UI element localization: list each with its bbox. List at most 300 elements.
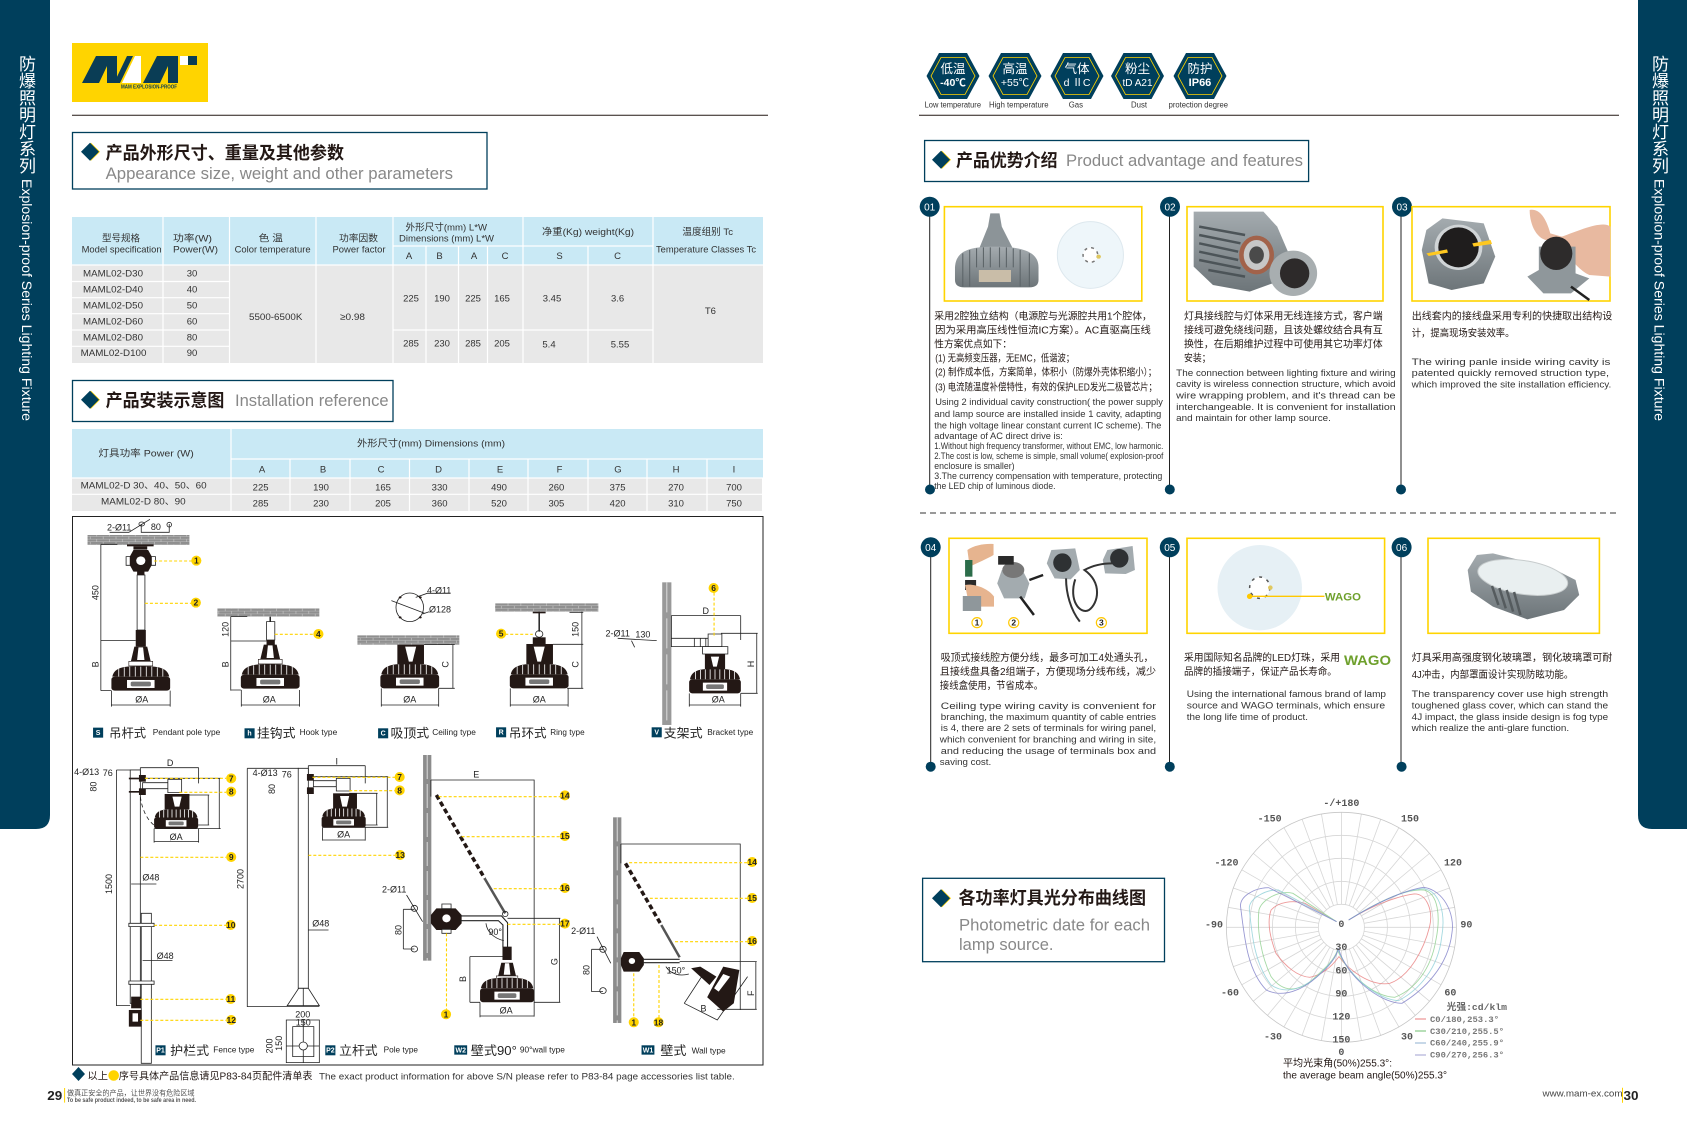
feature 06 Chinese text: 灯具采用高强度钢化玻璃罩，钢化玻璃罩可耐 xyxy=(1412,651,1612,664)
heading: photometric data: lamp source. xyxy=(959,935,1054,954)
table header labels: Model specification xyxy=(82,245,162,256)
panel: upper installation diagrams xyxy=(88,519,758,741)
diagram: fence type: 80 xyxy=(88,782,98,792)
diagram: 90 degree wall type: 14 xyxy=(560,790,570,800)
badge 03: 03 xyxy=(1396,202,1408,214)
feature 01 English text: Using 2 individual cavity construction( the power supply xyxy=(935,397,1163,408)
photo: wiring panel and hand xyxy=(1422,210,1610,300)
diagram: wall type: 18 xyxy=(654,1017,664,1027)
polar angle labels: 30 xyxy=(1401,1032,1413,1043)
badge 05: 05 xyxy=(1164,543,1176,554)
dimension table labels: A xyxy=(259,464,266,475)
mount type captions, first row: S xyxy=(96,730,101,737)
diagram: fence type: 11 xyxy=(226,994,236,1004)
feature 04 Chinese text: 接线盒使用，节省成本。 xyxy=(940,679,1043,692)
feature 06 English text: which realize the anti-glare function. xyxy=(1411,723,1569,734)
diagram: pole type: 2700 xyxy=(236,869,246,889)
polar angle labels: -30 xyxy=(1264,1032,1282,1043)
feature 01 English text: advantage of AC direct drive is: xyxy=(934,431,1063,442)
dimension table labels: 灯具功率 Power (W) xyxy=(98,448,194,460)
dimension table labels: 外形尺寸(mm) Dimensions (mm) xyxy=(357,438,505,450)
distribution curves xyxy=(1241,887,1452,1003)
table header labels: S xyxy=(556,251,563,262)
feature 01 Chinese text: 因为采用高压线性恒流IC方案）。AC直驱高压线 xyxy=(935,323,1151,336)
diagram: bracket type: H xyxy=(746,661,756,667)
feature 06 English text: toughened glass cover, which can stand the xyxy=(1412,701,1608,712)
feature 03 English text: patented quickly removed struction type, xyxy=(1412,368,1609,379)
table body values: ≥0.98 xyxy=(340,312,365,323)
polar angle labels: 150 xyxy=(1401,815,1419,826)
table body values: 80 xyxy=(187,333,197,344)
mount type captions, first row: V xyxy=(654,730,659,737)
photo: wiring cavity connection xyxy=(1194,212,1317,296)
table body values: MAML02-D40 xyxy=(83,285,143,296)
diagram: fence type: 10 xyxy=(226,920,236,930)
feature 02 English text xyxy=(1175,368,1396,424)
feature 01 Chinese text: (1) 无高频变压器，无EMC，低谐波； xyxy=(935,351,1074,364)
page number right with website: 30 xyxy=(1624,1088,1638,1103)
mount type captions, second row: 壁式90° xyxy=(471,1043,517,1058)
heading English: Photometric date for each xyxy=(959,916,1150,935)
polar angle labels: 90 xyxy=(1460,921,1472,932)
mount type captions, second row: P1 xyxy=(156,1048,165,1055)
mount type captions, second row: 护栏式 xyxy=(170,1043,210,1058)
feature 03 Chinese text xyxy=(1412,309,1612,339)
right band English title: Explosion-proof Series Lighting Fixture xyxy=(1652,179,1666,421)
mount type captions, second row: W1 xyxy=(643,1047,653,1054)
diagram: pendant pole type xyxy=(88,519,201,707)
badge 06: 06 xyxy=(1396,543,1408,554)
photo: LED disc with WAGO terminal xyxy=(1218,545,1361,630)
panel: feature 05 xyxy=(1160,537,1391,772)
photo frame 01 xyxy=(944,207,1142,301)
diagram: wall type: 1 xyxy=(631,1017,636,1027)
dimension table labels: G xyxy=(614,464,622,475)
badge: high temperature: +55℃ xyxy=(1001,77,1030,89)
mount type captions, first row: R xyxy=(499,730,504,737)
feature 04 English text: and reducing the usage of terminals box and xyxy=(941,746,1156,757)
heading: product advantage xyxy=(925,140,1309,182)
photo: toughened glass cover xyxy=(1468,553,1579,619)
diagram: pole type: 150 xyxy=(296,1017,311,1027)
polar angle labels: -60 xyxy=(1221,989,1239,1000)
badge: low temperature: -40℃ xyxy=(940,77,966,89)
badge: gas: 气体 xyxy=(1064,61,1090,76)
logo tagline: MAM EXPLOSION-PROOF xyxy=(121,84,177,90)
panel: feature 06 xyxy=(1392,537,1612,772)
diagram: pendant pole type: 2-Ø11 xyxy=(107,523,131,533)
header rule right xyxy=(919,114,1619,116)
diagram: pendant pole type: 2 xyxy=(193,598,198,608)
diagram: fence type xyxy=(74,758,236,1063)
diagram: fence type: D xyxy=(167,758,174,768)
feature 05 Chinese text xyxy=(1184,651,1391,678)
diagram: ceiling type: C xyxy=(440,661,450,668)
table header labels xyxy=(82,222,756,262)
polar angle labels: 0 xyxy=(1338,920,1344,931)
diagram: pole type: 150 xyxy=(274,1036,284,1051)
mount type captions, first row: C xyxy=(381,731,386,738)
badge 03 xyxy=(1392,197,1412,494)
table body values: 5.55 xyxy=(611,340,629,351)
diagram: 90 degree wall type: 16 xyxy=(560,883,570,893)
table: parameters xyxy=(72,217,763,363)
polar angle labels: 150 xyxy=(1332,1035,1350,1046)
polar angle labels: 60 xyxy=(1444,989,1456,1000)
diagram: 90 degree wall type: B xyxy=(458,976,468,982)
diagram: 90 degree wall type: 15 xyxy=(560,831,570,841)
page number left with slogan: 做真正安全的产品，让世界没有危险区域 xyxy=(67,1088,195,1098)
dimension table row 1: 700 xyxy=(726,483,742,494)
photo frame 05 xyxy=(1187,538,1385,633)
table header labels: C xyxy=(502,251,509,262)
diagram: hook type xyxy=(217,608,323,707)
dimension table row 2: 310 xyxy=(668,499,684,510)
feature 01 Chinese text: 性方案优点如下： xyxy=(934,337,1012,350)
polar angle labels: 90 xyxy=(1335,990,1347,1001)
photo frame 02 xyxy=(1187,207,1383,301)
diagram: 90 degree wall type: ØA xyxy=(500,1005,513,1015)
table header labels: Power(W) xyxy=(173,245,218,256)
right side band xyxy=(1638,0,1687,829)
dimension table labels: E xyxy=(497,464,503,475)
photo: wiring steps xyxy=(963,544,1135,628)
page number left with slogan: To be safe product indeed, to be safe area in need. xyxy=(67,1098,196,1104)
diagram: bracket type: D xyxy=(703,606,710,616)
polar angle labels: 120 xyxy=(1332,1012,1350,1023)
diagram: pole type: I xyxy=(336,756,338,766)
feature 01 English text xyxy=(934,397,1164,492)
feature 04 Chinese text: 且接线盘具备2组端子，方便现场分线布线，减少 xyxy=(940,665,1156,678)
dimension table row 2: 285 xyxy=(253,499,269,510)
table header labels: 功率(W) xyxy=(173,233,212,245)
diagram: 90 degree wall type: E xyxy=(473,769,479,779)
diagram: pendant pole type: 1 xyxy=(194,556,199,566)
mount type captions, first row xyxy=(93,727,753,741)
footnote left xyxy=(72,1067,735,1082)
diagram: ceiling type: ØA xyxy=(403,695,416,705)
badge 04 xyxy=(921,537,941,772)
feature 02 Chinese text: 换性，在后期维护过程中可使用其它功率灯体 xyxy=(1184,337,1383,350)
feature 04 Chinese text xyxy=(940,651,1156,692)
table header labels: 色 温 xyxy=(259,233,284,245)
photo frame 06 xyxy=(1428,538,1599,633)
badge: low temperature: Low temperature xyxy=(925,101,982,110)
diagram: hook type: ØA xyxy=(263,695,276,705)
heading Chinese: 各功率灯具光分布曲线图 xyxy=(958,888,1146,908)
table body values: 285 xyxy=(403,339,419,350)
heading English: Product advantage and features xyxy=(1066,151,1303,170)
table header labels: A xyxy=(406,251,413,262)
feature 06 English text xyxy=(1411,689,1608,734)
panel: feature 01 xyxy=(920,197,1164,494)
diagram: pole type: 13 xyxy=(395,850,405,860)
feature 02 Chinese text xyxy=(1184,309,1383,364)
table body values: 285 xyxy=(465,339,481,350)
badge: high temperature xyxy=(988,53,1049,110)
feature 06 Chinese text xyxy=(1412,651,1612,681)
mount type captions, second row: P2 xyxy=(326,1048,335,1055)
badge: protection degree: IP66 xyxy=(1189,77,1211,89)
diagram: pole type: 4-Ø13 xyxy=(253,768,278,778)
heading: installation reference xyxy=(72,380,393,422)
diagram: fence type: 8 xyxy=(229,787,234,797)
dimension table row 2 xyxy=(101,497,742,510)
diagram: fence type: 9 xyxy=(229,852,234,862)
diagram: fence type: Ø48 xyxy=(157,951,174,961)
diagram: bracket type: 130 xyxy=(635,629,650,639)
diagram: wall type: 16 xyxy=(747,936,757,946)
feature 04 English text: saving cost. xyxy=(940,757,991,768)
feature 04 English text xyxy=(939,701,1157,768)
mount type captions, first row: 吸顶式 xyxy=(390,727,430,741)
right band Chinese title: 防爆照明灯系列 xyxy=(1652,55,1669,176)
polar angle labels: -90 xyxy=(1205,921,1223,932)
feature 02 English text: wire wrapping problem, and it's thread can be xyxy=(1175,390,1396,401)
diagram: pendant pole type: 450 xyxy=(91,585,101,600)
diagram: 90 degree wall type: 17 xyxy=(560,919,570,929)
feature 05 English text: source and WAGO terminals, which ensure xyxy=(1187,701,1385,712)
diagram: hook type: B xyxy=(220,661,230,667)
dimension table row 1: 260 xyxy=(548,483,564,494)
diagram: ceiling type: Ø128 xyxy=(429,604,451,614)
dimension table row 1 xyxy=(81,481,742,494)
photo: wiring steps: 3 xyxy=(1099,618,1104,628)
mount type captions, second row: 90°wall type xyxy=(520,1045,565,1055)
beam angle note: 平均光束角(50%)255.3°: xyxy=(1283,1057,1392,1070)
page number right with website: www.mam-ex.com xyxy=(1541,1089,1622,1099)
diagram: 90 degree wall type: G xyxy=(550,958,560,965)
table header labels: C xyxy=(614,251,621,262)
feature 04 Chinese text: 吸顶式接线腔方便分线，最多可加工4处通头孔， xyxy=(941,651,1153,664)
diagram: fence type: 12 xyxy=(226,1015,236,1025)
dimension table row 2: 750 xyxy=(726,499,742,510)
feature 01 English text: 3.The currency compensation with temperature, protecting xyxy=(934,471,1162,482)
diagram: wall type: 2-Ø11 xyxy=(571,926,595,936)
left band Chinese title: 防爆照明灯系列 xyxy=(19,55,36,176)
badge: dust: Dust xyxy=(1131,101,1148,110)
heading Chinese: 产品优势介绍 xyxy=(956,151,1058,171)
header rule left xyxy=(72,114,768,116)
heading English: Installation reference xyxy=(235,391,389,410)
diagram: hook type: 4 xyxy=(316,629,321,639)
badge: dust: tD A21 xyxy=(1122,78,1153,89)
dimension table row 1: MAML02-D 30、40、50、60 xyxy=(81,481,207,492)
mount type captions, second row xyxy=(155,1043,726,1058)
chart legend: C60/240,255.9° xyxy=(1430,1039,1504,1049)
chart: polar light distribution xyxy=(1205,798,1507,1082)
photo: LED disc with WAGO terminal: WAGO xyxy=(1325,591,1361,603)
table body values: 60 xyxy=(187,317,197,328)
table header labels: 功率因数 xyxy=(339,233,378,245)
table body values: 40 xyxy=(187,285,197,296)
feature 01 English text: 2.The cost is low, scheme is simple, small volume( explosion-proof xyxy=(934,451,1164,462)
badge 02: 02 xyxy=(1164,202,1176,214)
diagram: pendant pole type: 80 xyxy=(151,522,161,532)
feature 02 Chinese text: 接线可避免绕线问题，且该处螺纹结合具有互 xyxy=(1184,323,1383,336)
page number left with slogan xyxy=(47,1088,196,1104)
feature 03 English text xyxy=(1411,357,1611,391)
chart legend: 光强:cd/klm xyxy=(1447,1001,1507,1013)
table header labels: Power factor xyxy=(332,245,386,256)
beam angle note xyxy=(1283,1057,1447,1082)
diagram: fence type: 7 xyxy=(229,773,234,783)
feature 03 English text: which improved the site installation efficiency. xyxy=(1411,380,1611,391)
panel: feature 03 xyxy=(1392,197,1612,494)
dashed section divider xyxy=(920,512,1617,514)
mount type captions, first row: Pendant pole type xyxy=(153,727,221,737)
heading: photometric data xyxy=(923,878,1164,962)
table body values: 5.4 xyxy=(542,340,556,351)
photo: wiring steps: 1 xyxy=(975,618,980,628)
table body values: 5500-6500K xyxy=(249,312,303,323)
table body values: 3.45 xyxy=(543,294,561,305)
diagram: hook type: 120 xyxy=(220,622,230,637)
table body values: 165 xyxy=(494,294,510,305)
chart legend: C90/270,256.3° xyxy=(1430,1050,1504,1060)
badge: low temperature xyxy=(925,53,982,110)
diagram: pole type: 76 xyxy=(282,769,292,779)
heading English: Appearance size, weight and other parameters xyxy=(106,164,453,183)
feature 03 Chinese text: 出线套内的接线盘采用专利的快捷取出结构设 xyxy=(1412,309,1612,322)
panel: feature 04 xyxy=(921,537,1157,772)
diagram: ceiling type xyxy=(357,585,459,707)
diagram: bracket type: 2-Ø11 xyxy=(606,629,630,639)
badge: dust xyxy=(1111,53,1164,110)
polar angle labels: -120 xyxy=(1214,858,1239,869)
dimension table row 1: 270 xyxy=(668,483,684,494)
feature 01 Chinese text: (2) 制作成本低，方案简单，体积小（防爆外壳体积缩小）； xyxy=(935,366,1156,379)
mount type captions, second row: Fence type xyxy=(213,1045,255,1055)
table body values: 50 xyxy=(187,301,197,312)
left band English title: Explosion-proof Series Lighting Fixture xyxy=(19,179,34,421)
feature 06 English text: 4J impact, the glass inside design is fog type xyxy=(1412,712,1608,723)
diagram: pole type xyxy=(236,756,405,1063)
dimension table labels: H xyxy=(673,464,680,475)
diagram: pole type: 200 xyxy=(265,1038,275,1053)
dimension table row 2: 205 xyxy=(375,499,391,510)
diagram: wall type: B xyxy=(701,1004,707,1014)
table body values: 225 xyxy=(403,294,419,305)
badge 01: 01 xyxy=(924,202,936,214)
dimension table labels xyxy=(98,438,735,475)
table body values: MAML02-D50 xyxy=(83,301,143,312)
mount type captions, second row: Pole type xyxy=(384,1045,418,1055)
table body values xyxy=(81,269,716,359)
diagram: wall type: 150° xyxy=(667,965,686,975)
polar angle labels: 0 xyxy=(1338,1048,1344,1059)
table header labels: Dimensions (mm) L*W xyxy=(399,234,494,245)
badge: dust: 粉尘 xyxy=(1125,61,1150,76)
badge: low temperature: 低温 xyxy=(940,62,966,76)
diagram: 90 degree wall type: 90° xyxy=(488,927,502,937)
badge 06 xyxy=(1392,537,1412,772)
feature 02 English text: and maintain for other lamp source. xyxy=(1176,413,1331,424)
mount type captions, first row: Hook type xyxy=(300,727,337,737)
feature 01 English text: 1.Without high frequency transformer, without EMC, low harmonic. xyxy=(934,441,1163,452)
heading: appearance size xyxy=(72,132,487,189)
badge: gas: d ⅡC xyxy=(1064,77,1091,89)
left side band xyxy=(0,0,50,829)
feature 04 English text: which convenient for branching and wiring in site, xyxy=(939,735,1156,746)
diagram: fence type: ØA xyxy=(170,832,183,842)
feature 01 English text: and lamp source are installed inside 1 cavity, adapting xyxy=(934,409,1161,420)
feature 02 English text: cavity is wireless connection structure, which avoid xyxy=(1176,379,1396,390)
badge: gas xyxy=(1050,53,1104,110)
footnote left: The exact product information for above S/N please refer to P83-84 page accessories list table. xyxy=(319,1071,735,1082)
diagram: wall type: 14 xyxy=(747,857,757,867)
polar angle labels xyxy=(1205,798,1472,1059)
dimension table row 1: 375 xyxy=(610,483,626,494)
table body values: MAML02-D60 xyxy=(83,317,143,328)
panel: lower installation diagrams xyxy=(74,755,757,1063)
diagram: ring type: 5 xyxy=(499,629,504,639)
dimension table labels: D xyxy=(435,464,442,475)
diagram: 90 degree wall type: 1 xyxy=(444,1009,449,1019)
heading Chinese: 产品安装示意图 xyxy=(106,391,224,411)
polar angle labels: 120 xyxy=(1444,858,1462,869)
badge 05 xyxy=(1160,537,1180,772)
diagram: pole type: Ø48 xyxy=(312,919,329,929)
table body values: MAML02-D100 xyxy=(81,348,146,359)
feature 06 Chinese text: 4J冲击，内部罩面设计实现防眩功能。 xyxy=(1412,668,1573,681)
feature 04 English text: branching, the maximum quantity of cable entries xyxy=(941,712,1156,723)
diagram: bracket type xyxy=(606,582,758,725)
badge 04: 04 xyxy=(925,543,937,554)
dimension table labels: B xyxy=(320,464,326,475)
diagram: pole type: 200 xyxy=(295,1010,310,1020)
badge 01 xyxy=(920,197,940,494)
mount type captions, first row: 吊环式 xyxy=(509,727,547,741)
diagram: fence type: 76 xyxy=(103,768,113,778)
chart legend: C0/180,253.3° xyxy=(1430,1015,1499,1025)
table header labels: B xyxy=(436,251,443,262)
table header labels: 温度组别 Tc xyxy=(682,226,733,238)
table header labels: 外形尺寸(mm) L*W xyxy=(406,222,487,234)
photo frame 04 xyxy=(949,538,1147,633)
dimension table row 1: 165 xyxy=(375,483,391,494)
diagram: 90 degree wall type: 80 xyxy=(393,925,403,935)
feature 01 English text: the high voltage linear constant current IC scheme). The xyxy=(934,420,1161,431)
panel: feature 02 xyxy=(1160,197,1396,494)
page number right with website xyxy=(1541,1088,1638,1103)
feature 02 English text: interchangeable. It is convenient for installation xyxy=(1176,402,1396,413)
diagram: pole type: 8 xyxy=(397,785,402,795)
feature 04 English text: is 4, there are 2 sets of terminals for wiring panel, xyxy=(941,723,1156,734)
diagram: 90 degree wall type: 2-Ø11 xyxy=(382,885,406,895)
mount type captions, second row: 立杆式 xyxy=(339,1043,378,1058)
feature 01 Chinese text xyxy=(934,309,1157,393)
feature 05 Chinese text: WAGO xyxy=(1344,652,1391,668)
photo: lamp and LED disc xyxy=(955,213,1123,288)
dimension table row 1: 190 xyxy=(313,483,329,494)
diagram: wall type: 80 xyxy=(582,965,592,975)
table body values: T6 xyxy=(705,306,716,317)
diagram: ceiling type: 4-Ø11 xyxy=(427,585,451,595)
feature 02 Chinese text: 灯具接线腔与灯体采用无线连接方式，客户端 xyxy=(1184,309,1383,322)
dimension table row 1: 330 xyxy=(432,483,448,494)
feature 06 English text: The transparency cover use high strength xyxy=(1412,689,1608,700)
chart legend: C30/210,255.5° xyxy=(1430,1027,1504,1037)
dimension table row 1: 490 xyxy=(491,483,507,494)
mount type captions, second row: Wall type xyxy=(692,1045,726,1055)
table body values: 230 xyxy=(434,339,450,350)
photo: wiring steps: 2 xyxy=(1011,618,1016,628)
mount type captions, first row: Bracket type xyxy=(707,727,753,737)
diagram: ring type: C xyxy=(571,661,581,668)
dimension table row 2: MAML02-D 80、90 xyxy=(101,497,186,508)
feature 02 Chinese text: 安装； xyxy=(1184,351,1211,364)
